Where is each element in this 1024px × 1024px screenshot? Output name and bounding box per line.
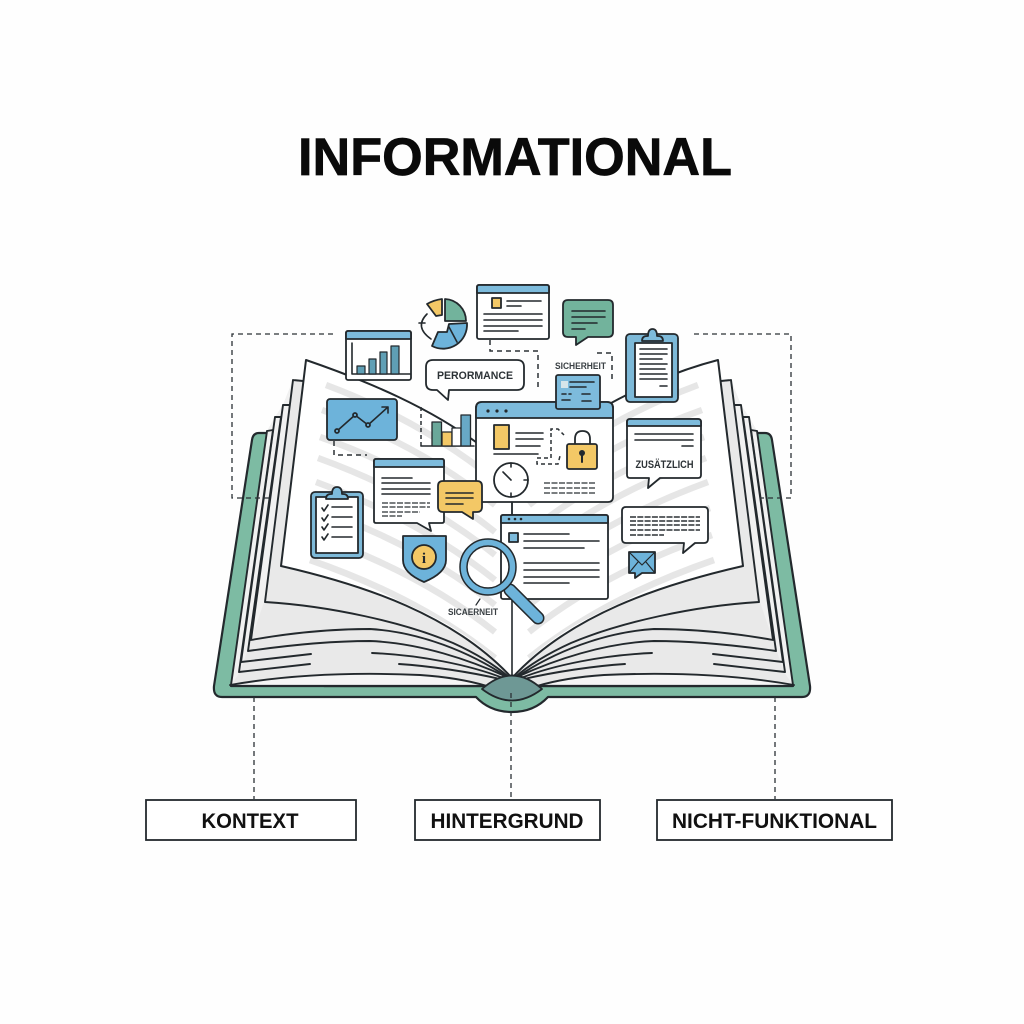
- icon: green speech bubble: [563, 300, 613, 345]
- label box: nicht-funktional: NICHT-FUNKTIONAL: [672, 810, 877, 833]
- icon: lower window: [501, 515, 608, 599]
- label box: hintergrund: [415, 800, 600, 840]
- title: INFORMATIONAL: [298, 128, 732, 187]
- icon: pie chart: [419, 299, 467, 349]
- label: sicherheit bottom: [448, 599, 498, 618]
- icon: main window: [476, 402, 613, 502]
- callout: zusaetzlich: ZUSÄTZLICH: [636, 458, 694, 471]
- icon: yellow speech bubble: [438, 481, 482, 519]
- book base line: [231, 685, 793, 687]
- connector: main to lower window: [511, 502, 513, 515]
- dashed bracket: right: [694, 334, 791, 498]
- dashed connector: security: [597, 353, 612, 383]
- dashed leader: hintergrund: [510, 693, 512, 799]
- label: sicherheit top: SICHERHEIT: [555, 361, 606, 372]
- left page stack: [230, 380, 512, 686]
- dashed leader: kontext: [253, 697, 255, 799]
- icon: left window bubble: [374, 459, 444, 531]
- faint page text lines: [310, 385, 714, 658]
- dashed leader: nicht-funktional: [774, 697, 776, 799]
- callout: right text bubble: [622, 507, 708, 553]
- callout: zusaetzlich: [627, 419, 701, 488]
- right page stack: [512, 380, 794, 686]
- dashed connector: line chart: [334, 441, 367, 455]
- open top pages: [281, 360, 743, 678]
- dashed connector: top window: [490, 340, 538, 390]
- icon: bar chart window: [346, 331, 411, 380]
- open book: [214, 360, 810, 712]
- icon: clipboard left: [311, 487, 363, 558]
- centre fold: [511, 500, 513, 680]
- dashed bracket: left: [232, 334, 333, 498]
- label box: kontext: [146, 800, 356, 840]
- icon: shield: i: [422, 551, 426, 567]
- icon: shield: [403, 536, 446, 582]
- label box: nicht-funktional: [657, 800, 892, 840]
- icon: small blue card: [556, 375, 600, 409]
- icon: envelope: [629, 552, 655, 578]
- callout: performance: [426, 360, 524, 400]
- label box: kontext: KONTEXT: [202, 810, 299, 833]
- label: sicherheit bottom: SICAERNEIT: [448, 607, 498, 618]
- icon: top window: [477, 285, 549, 339]
- icon: blue line chart: [327, 399, 397, 440]
- icon: magnifying glass: [464, 542, 538, 618]
- book spine: [482, 676, 542, 700]
- label box: hintergrund: HINTERGRUND: [430, 810, 584, 833]
- icon: mini bar chart: [421, 407, 474, 446]
- icon: clipboard right: [626, 329, 678, 402]
- book cover: [214, 433, 810, 712]
- callout: performance: PERORMANCE: [437, 370, 513, 382]
